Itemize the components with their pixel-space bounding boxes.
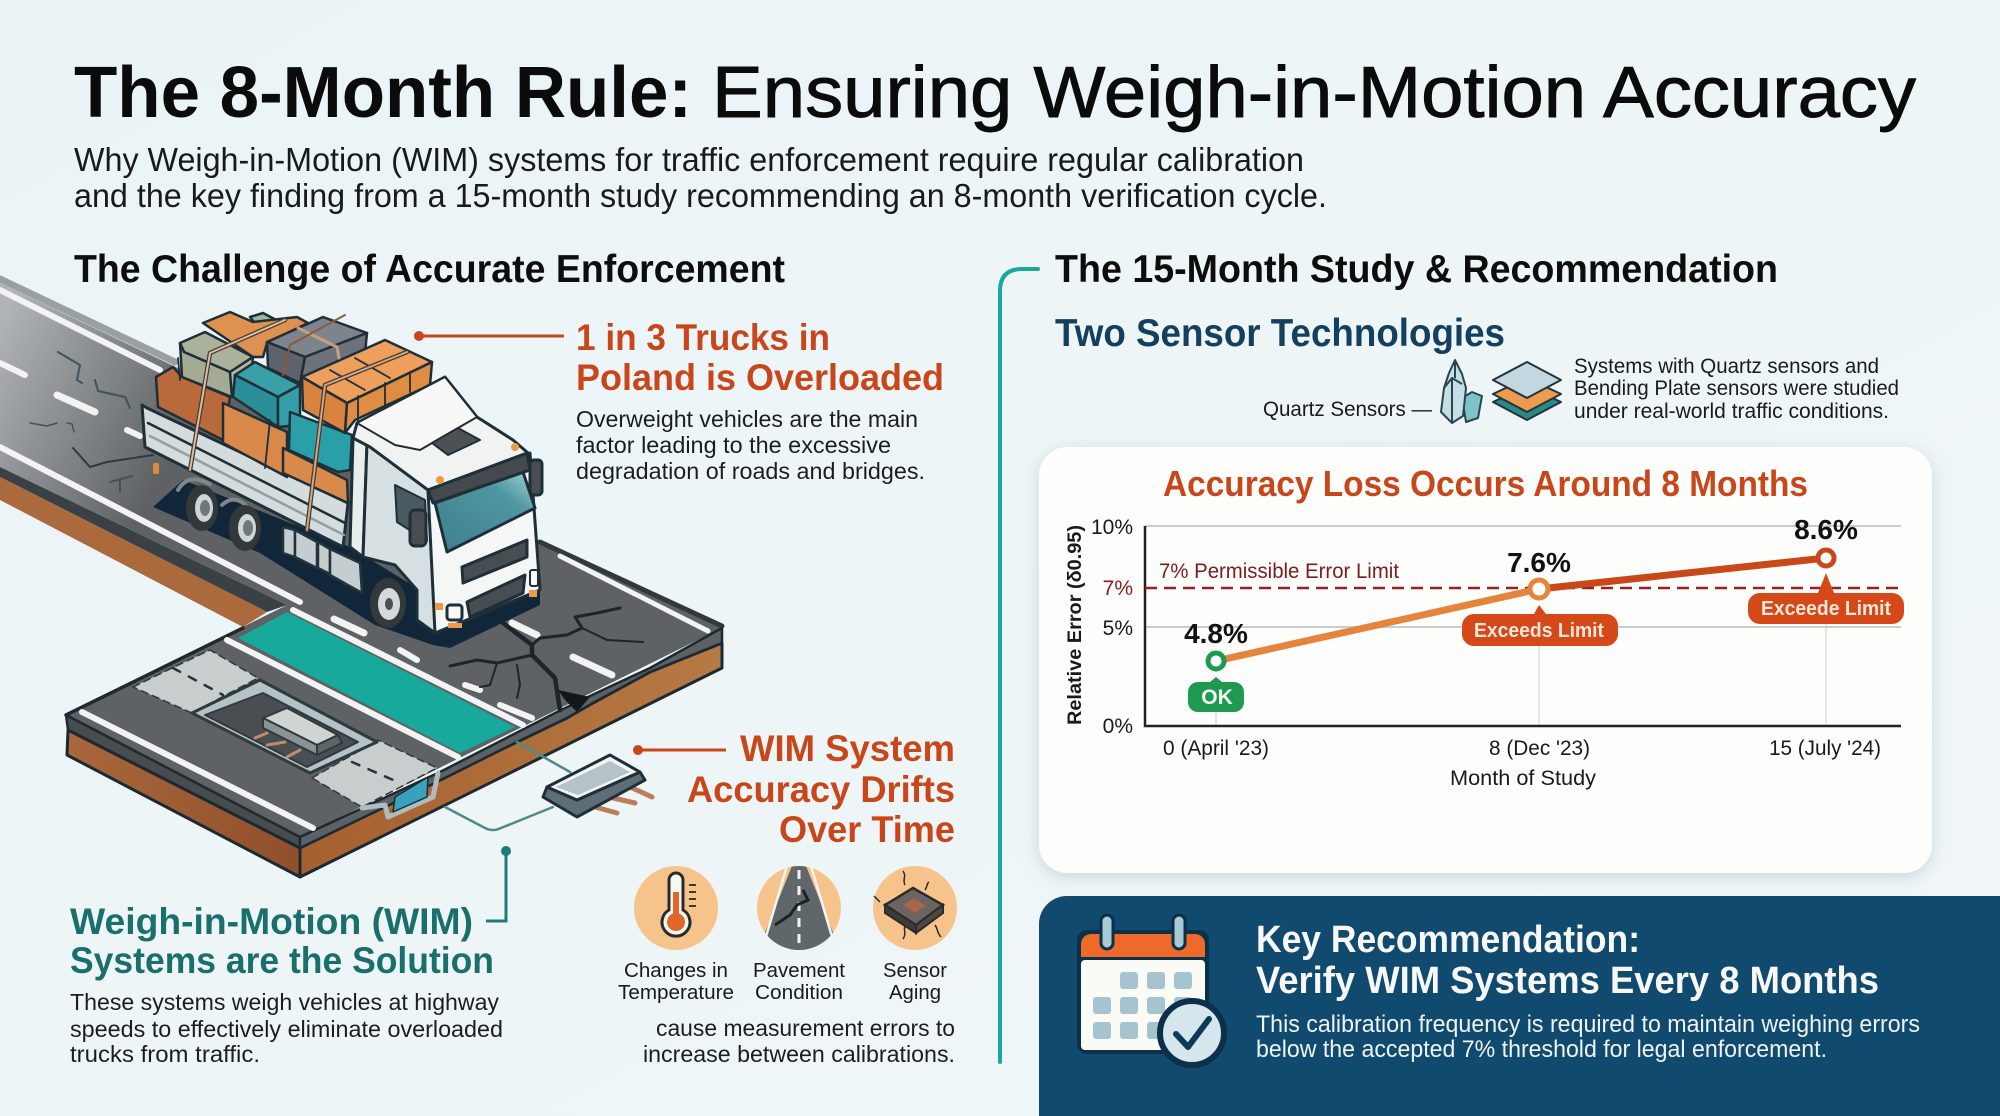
- side window: [395, 485, 427, 541]
- callout text: factor leading to the excessive: [576, 432, 891, 458]
- recommendation heading: Verify WIM Systems Every 8 Months: [1256, 960, 1879, 1002]
- icon labels: Condition: [755, 982, 843, 1004]
- badge: exceeds limit: Exceeds Limit: [1474, 620, 1604, 642]
- sensor description: [1574, 355, 1899, 423]
- cargo boxes: [156, 312, 432, 503]
- front wheel: [370, 578, 406, 628]
- callout: WIM accuracy drift: [618, 728, 957, 1067]
- solution text: speeds to effectively eliminate overloaded: [70, 1016, 503, 1042]
- windshield: [435, 472, 535, 552]
- right mirror: [530, 460, 542, 495]
- icon: calendar with check: [1077, 915, 1224, 1065]
- left road side dirt: [0, 467, 287, 627]
- flatbed side: [142, 405, 348, 547]
- cab: [350, 377, 542, 633]
- cab front: [428, 453, 540, 633]
- recommendation text: This calibration frequency is required to maintain weighing errors: [1256, 1011, 1920, 1038]
- sensor port: [362, 773, 438, 817]
- heading: two sensor technologies: Two Sensor Technologies: [1055, 312, 1505, 355]
- callout heading: [576, 317, 944, 398]
- callout leader: [414, 331, 564, 341]
- icon labels: [618, 960, 947, 1004]
- icon: quartz crystal: [1441, 360, 1482, 423]
- drift text: increase between calibrations.: [643, 1041, 955, 1067]
- y-axis ticks: 5%: [1103, 617, 1133, 640]
- drift heading: Over Time: [779, 809, 955, 850]
- x-axis labels: [1163, 737, 1881, 760]
- data values: [1184, 514, 1858, 649]
- title: The 8-Month Rule:: [74, 53, 692, 133]
- upper grille: [462, 540, 527, 583]
- truck shadow: [153, 480, 540, 648]
- data values: 4.8%: [1184, 618, 1248, 649]
- recommendation background: [1039, 896, 2000, 1116]
- sensor description: Systems with Quartz sensors and: [1574, 355, 1879, 378]
- y-axis ticks: 0%: [1103, 715, 1133, 738]
- icon labels: Temperature: [618, 982, 734, 1004]
- headlight: [447, 605, 462, 620]
- y-axis ticks: 7%: [1103, 577, 1133, 600]
- road top edge: [0, 279, 722, 626]
- drift heading: WIM System: [740, 728, 955, 769]
- axes: [1145, 526, 1901, 726]
- recommendation text: [1256, 1011, 1920, 1063]
- callout: 1 in 3 trucks: [414, 317, 944, 484]
- crack hole: [558, 690, 590, 712]
- sensor technologies row: [1263, 355, 1899, 423]
- y-axis ticks: 10%: [1091, 516, 1133, 539]
- solution heading: Weigh-in-Motion (WIM): [70, 901, 473, 942]
- callout: WIM solution: [70, 846, 511, 1067]
- permissible limit line: [1145, 587, 1901, 589]
- solution text: trucks from traffic.: [70, 1041, 260, 1067]
- icon labels: Sensor: [883, 960, 947, 982]
- cab roof: [353, 377, 528, 490]
- x-axis labels: 15 (July '24): [1769, 737, 1881, 760]
- cab rear panel: [350, 438, 367, 557]
- road surface: [0, 283, 722, 837]
- solution connector: [486, 849, 506, 921]
- y-axis title: Relative Error (δ0.95): [1065, 525, 1086, 725]
- recommendation heading: [1256, 919, 1879, 1002]
- sensor description: Bending Plate sensors were studied: [1574, 377, 1899, 400]
- lane markings: [0, 290, 708, 828]
- sensor recess: [192, 680, 377, 773]
- drift text: cause measurement errors to: [656, 1015, 955, 1041]
- solution heading: [70, 901, 494, 981]
- solution text: These systems weigh vehicles at highway: [70, 989, 499, 1015]
- title: [74, 53, 1916, 133]
- callout text: degradation of roads and bridges.: [576, 458, 925, 484]
- rear fenders: [178, 479, 252, 531]
- data line: [1216, 558, 1826, 661]
- recommendation text: below the accepted 7% threshold for legal enforcement.: [1256, 1036, 1827, 1063]
- drift heading: [687, 728, 955, 850]
- platform left side: [66, 715, 300, 877]
- roof hatch: [432, 428, 480, 455]
- icon labels: Pavement: [753, 960, 845, 982]
- cab side: [363, 443, 437, 633]
- concrete panels: [133, 650, 437, 807]
- heading: the study: The 15-Month Study & Recommendation: [1055, 248, 1778, 291]
- x-axis labels: 8 (Dec '23): [1489, 737, 1590, 760]
- badge: OK: OK: [1201, 686, 1233, 709]
- truck: [142, 312, 542, 648]
- x-axis labels: 0 (April '23): [1163, 737, 1269, 760]
- subtitle: and the key finding from a 15-month study recommending an 8-month verification cycle.: [74, 177, 1327, 214]
- quartz label: Quartz Sensors —: [1263, 398, 1432, 421]
- icon: aging sensor chip: [873, 866, 957, 950]
- pavement cracks: [30, 352, 643, 710]
- wind deflector: [357, 377, 477, 450]
- data points: [1208, 550, 1834, 669]
- icon: cracked road: [757, 866, 841, 950]
- platform right side: [300, 628, 722, 877]
- panel: key recommendation: [1039, 896, 2000, 1116]
- heading: the challenge: The Challenge of Accurate Enforcement: [74, 248, 785, 291]
- icon: bending plate stack: [1493, 362, 1561, 420]
- callout heading: Poland is Overloaded: [576, 357, 944, 398]
- icon labels: Aging: [889, 982, 941, 1004]
- wiring: [445, 742, 570, 830]
- lower grille: [467, 575, 525, 617]
- icon: thermometer: [634, 866, 718, 950]
- cab lights: [435, 443, 537, 628]
- solution heading: Systems are the Solution: [70, 940, 494, 981]
- recommendation heading: Key Recommendation:: [1256, 919, 1640, 961]
- external sensor chip: [543, 755, 652, 817]
- limit label: 7% Permissible Error Limit: [1159, 560, 1399, 583]
- callout text: [576, 406, 925, 484]
- section bracket: [1000, 269, 1038, 1062]
- teal WIM lane: [238, 612, 515, 753]
- callout heading: 1 in 3 Trucks in: [576, 317, 830, 358]
- icon labels: Changes in: [624, 960, 728, 982]
- gridlines: [1145, 526, 1901, 726]
- badge: exceeds limit: [1462, 605, 1618, 646]
- illustration: road with truck and WIM sensor: [0, 279, 722, 877]
- badge: exceede limit: Exceede Limit: [1761, 598, 1891, 620]
- data values: 8.6%: [1794, 514, 1858, 545]
- drift heading: Accuracy Drifts: [687, 769, 955, 810]
- x-axis title: Month of Study: [1450, 767, 1597, 790]
- subtitle: [74, 141, 1327, 214]
- chart title: Accuracy Loss Occurs Around 8 Months: [1163, 463, 1808, 504]
- badge: OK: [1188, 677, 1244, 712]
- rear wheels: [186, 485, 261, 551]
- panel: accuracy chart: [1039, 447, 1932, 873]
- right light: [530, 570, 538, 586]
- platform back edge: [66, 628, 243, 715]
- rear light: [153, 463, 159, 474]
- connector dot: [501, 846, 511, 856]
- y-axis ticks: [1091, 516, 1133, 738]
- title: Ensuring Weigh-in-Motion Accuracy: [712, 53, 1916, 133]
- callout text: Overweight vehicles are the main: [576, 406, 918, 432]
- solution text: [70, 989, 503, 1067]
- badge: exceede limit: [1748, 573, 1904, 624]
- sensor description: under real-world traffic conditions.: [1574, 400, 1889, 423]
- side boxes: [283, 527, 362, 593]
- side mirror: [410, 510, 426, 546]
- sun visor: [428, 453, 530, 503]
- data values: 7.6%: [1507, 547, 1571, 578]
- line chart: [1065, 514, 1904, 790]
- chart card: [1039, 447, 1932, 873]
- drift leader: [633, 745, 726, 755]
- drift text: [643, 1015, 955, 1067]
- cargo slats: [178, 358, 410, 468]
- subtitle: Why Weigh-in-Motion (WIM) systems for traffic enforcement require regular calibration: [74, 141, 1304, 178]
- cargo straps: [190, 315, 407, 530]
